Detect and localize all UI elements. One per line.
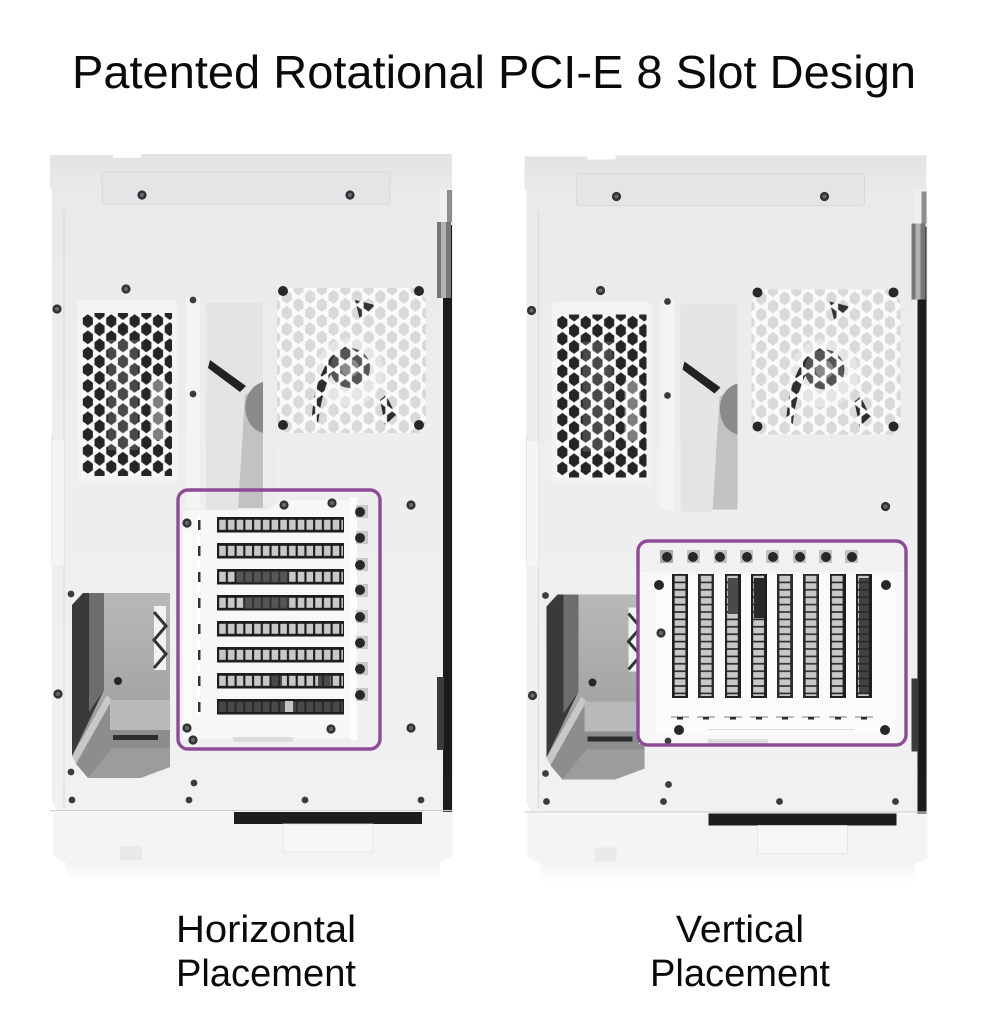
caption: vertical placement: Placement	[650, 953, 830, 995]
highlight frame: horizontal	[178, 490, 380, 749]
highlight frame: vertical	[638, 541, 906, 745]
panel: vertical placement case	[524, 156, 928, 882]
caption: horizontal placement: Horizontal	[176, 909, 356, 951]
PCI-E bracket: vertical slots	[639, 543, 905, 744]
caption: vertical placement: Vertical	[676, 909, 804, 951]
title: Patented Rotational PCI-E 8 Slot Design	[72, 46, 916, 98]
caption: horizontal placement: Placement	[176, 953, 356, 995]
PCI-E bracket: horizontal slots	[182, 497, 368, 745]
panel: horizontal placement case	[50, 154, 453, 881]
